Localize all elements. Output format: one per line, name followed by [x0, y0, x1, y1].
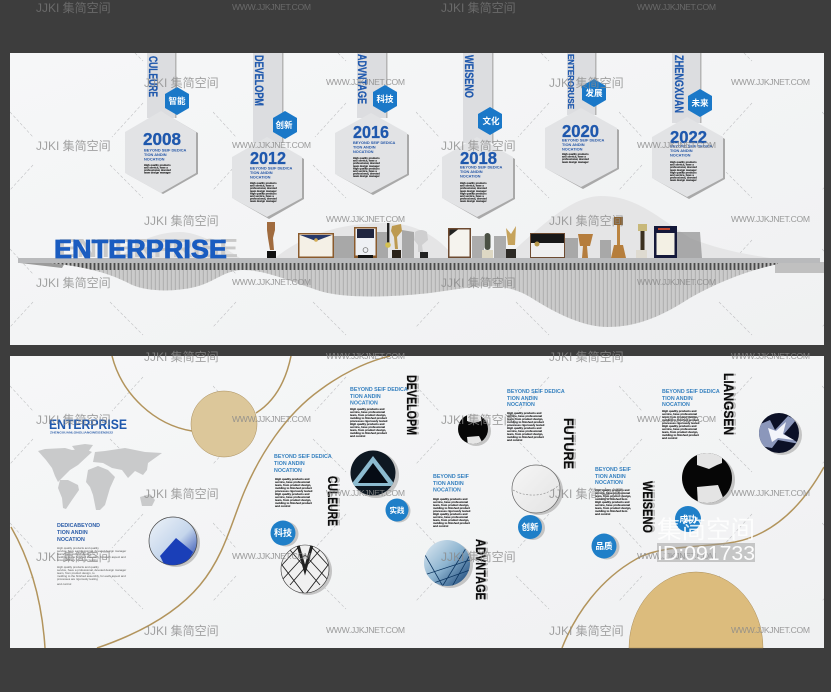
watermarks on top panel: JJKI 集简空间 — [441, 275, 516, 290]
timeline node 2008: NOCATION — [144, 156, 165, 162]
timeline node 2016: and service, have a — [353, 159, 377, 163]
timeline node 2008: 2008 — [143, 129, 181, 149]
timeline node 2020: High quality products — [562, 152, 589, 156]
badge: 科技 — [270, 520, 298, 546]
trophy: wood — [267, 222, 276, 258]
vertical label: FUTURE: FUTURE — [561, 418, 576, 469]
timeline node 2022: NOCATION — [670, 152, 691, 158]
text block: weiseno: team, from product design, — [595, 494, 631, 498]
text block: develop: molding to finished product — [350, 431, 387, 435]
text block: culture: team, from product design, — [275, 483, 311, 487]
text block: liangsen: TION ANDIN — [662, 396, 693, 402]
timeline node 2016: BEYOND SEIF DEDICA — [353, 140, 396, 145]
timeline node 2012: team design manager — [250, 199, 277, 203]
text block: develop: TION ANDIN — [350, 394, 381, 400]
text block: develop: NOCATION — [350, 400, 378, 406]
watermarks on bottom panel: JJKI 集简空间 — [549, 486, 624, 501]
timeline node 2020: ENTERORUSE — [566, 54, 575, 110]
text block: develop: processes rigorously tested — [350, 419, 388, 423]
margin watermarks: JJKI 集简空间 — [441, 0, 516, 15]
timeline node 2012: High quality products — [250, 181, 277, 185]
text block: advantage: service, have professional — [433, 515, 468, 519]
watermarks on bottom panel: WWW.JJKJNET.COM — [326, 625, 405, 635]
text block: future: processes rigorously tested — [507, 423, 545, 427]
text block: weiseno: TION ANDIN — [595, 474, 626, 480]
photo circle: lattice — [281, 540, 332, 595]
timeline node 2018: professional, devoted — [460, 197, 487, 201]
timeline node 2018: WEISENO — [462, 55, 474, 98]
trophy: tall bronze — [611, 217, 626, 258]
timeline node 2022: and service, have a — [670, 163, 694, 167]
photo circle: glowing triangle — [350, 450, 399, 498]
margin watermarks — [36, 0, 716, 15]
timeline node 2008: CULEURE — [146, 56, 158, 97]
text block: future: BEYOND SEIF DEDICA — [507, 389, 565, 395]
text block: weiseno: and control — [595, 512, 610, 516]
text block: liangsen: and control — [662, 436, 677, 440]
timeline node 2018: and service, have a — [460, 194, 484, 198]
watermarks on top panel: WWW.JJKJNET.COM — [232, 140, 311, 150]
gold circle: lower right — [629, 572, 763, 648]
text block: dedica: service, have a professional, devoted design manager — [57, 568, 126, 572]
timeline node 2008: TION ANDIN — [144, 152, 167, 157]
text block: develop: team, from product design, — [350, 428, 386, 432]
text block: develop: High quality products and — [350, 422, 385, 426]
timeline node 2016: NOCATION — [353, 149, 374, 154]
text block: advantage: High quality products and — [433, 497, 468, 501]
vertical label: CULEURE — [325, 476, 342, 526]
watermarks on top panel: WWW.JJKJNET.COM — [637, 140, 716, 150]
text block: liangsen: team, from product design, — [662, 430, 698, 434]
timeline node 2012: professional, devoted — [250, 186, 277, 190]
watermarks on bottom panel: WWW.JJKJNET.COM — [232, 551, 311, 561]
watermarks on top panel: WWW.JJKJNET.COM — [731, 77, 810, 87]
watermarks on top panel: JJKI 集简空间 — [441, 138, 516, 153]
watermarks on top panel: WWW.JJKJNET.COM — [232, 277, 311, 287]
gold circle: upper — [191, 391, 257, 457]
timeline node 2020: 发展 — [585, 88, 603, 98]
heading: ENTERPRISE: ENTERPRISE — [58, 233, 238, 263]
timeline node 2016: TION ANDIN — [353, 144, 376, 150]
timeline node 2022: BEYOND SEIF DEDICA — [670, 144, 713, 148]
text block: advantage: team, from product design, — [433, 503, 469, 507]
timeline node 2016: ADVNTAGE — [355, 54, 367, 104]
timeline node 2022: and service, have a — [670, 173, 694, 177]
watermarks on bottom panel: JJKI 集简空间 — [144, 349, 219, 364]
timeline node 2022: 2022 — [670, 127, 707, 147]
text block: culture: processes rigorously tested — [275, 489, 313, 493]
background hills behind shelf — [120, 196, 770, 258]
text block: culture: High quality products and — [275, 492, 310, 496]
photo circle: black building small — [458, 412, 491, 446]
text block: weiseno: High quality products and — [595, 488, 630, 492]
watermarks on bottom panel: WWW.JJKJNET.COM — [731, 351, 810, 361]
timeline node 2022: 未来 — [691, 98, 709, 108]
timeline node 2008: professional, devoted — [144, 168, 171, 172]
text block: advantage: BEYOND SEIF — [433, 474, 470, 480]
timeline node 2020: team design manager — [562, 160, 589, 164]
text block: develop: molding to finished product — [350, 416, 387, 420]
text block: culture: service, have professional — [275, 480, 310, 484]
text block: future: NOCATION — [507, 402, 535, 408]
vertical label: ADVNTAGE: ADVNTAGE — [476, 539, 490, 600]
timeline node 2016: team design manager — [353, 174, 380, 178]
cast shadows — [334, 230, 702, 258]
watermarks on top panel: WWW.JJKJNET.COM — [326, 214, 405, 224]
text block: dedica: High quality products and quality — [57, 565, 99, 569]
text block: liangsen: team, from product design, — [662, 415, 698, 419]
timeline node 2012: NOCATION — [250, 174, 271, 180]
text block: dedica: molding to the finished assembly, for each aspect and — [57, 555, 126, 559]
photo circle: black building large — [682, 450, 736, 505]
vertical label: FUTURE: FUTURE — [564, 418, 578, 469]
text block: develop — [350, 387, 408, 438]
timeline node 2018: professional, devoted — [460, 186, 487, 190]
watermarks on bottom panel: JJKI 集简空间 — [549, 349, 624, 364]
text block: develop: team, from product design, — [350, 413, 386, 417]
vertical label: DEVELOPM: DEVELOPM — [404, 375, 419, 435]
text block: liangsen: NOCATION — [662, 402, 690, 408]
margin watermarks: JJKI 集简空间 — [36, 0, 111, 15]
text block: future: molding to finished product — [507, 420, 544, 424]
watermarks on top panel: JJKI 集简空间 — [36, 138, 111, 153]
text block: liangsen: High quality products and — [662, 424, 697, 428]
watermarks on bottom panel: JJKI 集简空间 — [144, 623, 219, 638]
watermarks on bottom panel: JJKI 集简空间 — [441, 412, 516, 427]
timeline node 2018: High quality products — [460, 181, 487, 185]
photo circle: blue abstract — [149, 517, 200, 568]
watermarks on top panel: JJKI 集简空间 — [144, 75, 219, 90]
text block: culture: NOCATION — [274, 468, 302, 474]
world map — [38, 444, 162, 510]
text block: culture — [274, 454, 332, 508]
timeline node 2018: team design manager — [460, 199, 487, 203]
text block: develop: service, have professional — [350, 425, 385, 429]
heading: ENTERPRISE: ENTERPRISE — [54, 234, 227, 264]
text block: future: TION ANDIN — [507, 396, 538, 402]
text block: weiseno — [595, 467, 632, 516]
text block: dedica: molding to the finished assembly, for each aspect and — [57, 574, 126, 578]
badge: 科技: 科技 — [274, 527, 292, 538]
timeline node 2016: professional, devoted — [353, 172, 380, 176]
timeline node 2016: and service, have a — [353, 169, 377, 173]
vertical label: LIANGSEN: LIANGSEN — [724, 373, 738, 435]
text block: dedica: processes are rigorously testing — [57, 577, 98, 581]
timeline node 2016: High quality products — [353, 156, 380, 160]
vertical label: CULEURE: CULEURE — [328, 476, 342, 526]
timeline node 2012: professional, devoted — [250, 197, 277, 201]
timeline node 2018: High quality products — [460, 191, 487, 195]
text block: advantage: service, have professional — [433, 500, 468, 504]
text block: liangsen: processes rigorously tested — [662, 421, 700, 425]
badge: 创新 — [518, 515, 545, 540]
text block: future: High quality products and — [507, 426, 542, 430]
text block: future: team, from product design, — [507, 417, 543, 421]
text block: weiseno: NOCATION — [595, 480, 623, 486]
timeline node 2020: NOCATION — [562, 146, 583, 152]
trophy: bronze cup — [578, 234, 593, 258]
timeline node 2016: 科技 — [376, 94, 394, 104]
timeline node 2008 — [125, 53, 198, 194]
badge: 实践: 实践 — [390, 505, 405, 515]
timeline node 2012: BEYOND SEIF DEDICA — [250, 166, 293, 170]
text block: future — [507, 389, 565, 442]
text block: advantage: High quality products and — [433, 512, 468, 516]
timeline node 2020: professional, devoted — [562, 157, 589, 161]
timeline node 2018: BEYOND SEIF DEDICA — [460, 164, 503, 170]
timeline node 2022: TION ANDIN — [670, 148, 693, 153]
text block: culture: High quality products and — [275, 477, 310, 481]
text block: weiseno: molding to finished item — [595, 497, 628, 501]
vertical label: DEVELOPM — [404, 375, 422, 435]
timeline node 2022: High quality products — [670, 170, 697, 174]
text block: liangsen: service, have professional — [662, 412, 697, 416]
text block: dedica: High quality products and quality — [57, 546, 99, 550]
text block: develop: BEYOND SEIF DEDICA — [350, 387, 408, 393]
large ID watermark: 集简空间 — [657, 516, 755, 544]
timeline node 2012 — [232, 53, 304, 219]
panel: top wall elevation — [10, 53, 824, 345]
text block: advantage: molding to finished product — [433, 506, 470, 510]
text block: dedica: and control — [57, 582, 72, 586]
timeline node 2022: ZHENGXUAN — [672, 55, 684, 113]
timeline node 2016 — [335, 53, 409, 195]
panel: bottom wall elevation — [10, 349, 824, 648]
watermarks on top panel: JJKI 集简空间 — [549, 75, 624, 90]
watermarks on top panel: WWW.JJKJNET.COM — [637, 277, 716, 287]
trophy: silver — [414, 230, 428, 258]
text block: weiseno: service, have professional — [595, 503, 630, 507]
text block: future: team, from product design, — [507, 432, 543, 436]
text block: advantage: TION ANDIN — [433, 481, 464, 487]
text block: develop: and control — [350, 434, 365, 438]
timeline node 2018: TION ANDIN — [460, 169, 483, 174]
vertical label: LIANGSEN: LIANGSEN — [721, 373, 736, 435]
timeline node 2012: High quality products — [250, 191, 277, 195]
badge: hidden blue: 成功 — [679, 514, 697, 524]
timeline node 2018: 2018 — [460, 148, 497, 168]
gold curves — [11, 356, 824, 648]
timeline node 2016: professional, devoted — [353, 161, 380, 165]
watermarks on top panel: JJKI 集简空间 — [549, 213, 624, 228]
timeline node 2022: team design manager — [670, 178, 697, 182]
text block: liangsen: BEYOND SEIF DEDICA — [662, 389, 720, 395]
trophy: gold figure with medal — [385, 223, 402, 258]
text block: culture: TION ANDIN — [274, 461, 305, 467]
text block: dedica — [57, 523, 126, 586]
text block: dedica: TION ANDIN — [57, 530, 88, 536]
text block: advantage: NOCATION — [433, 488, 461, 494]
text block: weiseno: team, from product design, — [595, 506, 631, 510]
timeline node 2018: and service, have a — [460, 184, 484, 188]
certificate: navy frame — [654, 226, 677, 258]
timeline node 2012: and service, have a — [250, 184, 274, 188]
text block: weiseno: molding to finished item — [595, 509, 628, 513]
timeline node 2008: and service, have a — [144, 166, 168, 170]
watermarks on bottom panel — [36, 349, 810, 638]
text block: culture: team, from product design, — [275, 498, 311, 502]
timeline node 2018: team design manager — [460, 189, 487, 193]
timeline node 2022 — [652, 53, 725, 199]
badge: 创新: 创新 — [521, 522, 539, 532]
text block: liangsen: High quality products and — [662, 409, 697, 413]
timeline node 2016: team design manager — [353, 164, 380, 168]
text block: liangsen: molding to finished product — [662, 418, 699, 422]
watermarks on bottom panel: JJKI 集简空间 — [36, 412, 111, 427]
text block: advantage: and control — [433, 524, 448, 528]
text block: develop: service, have professional — [350, 410, 385, 414]
text block: dedica: service, have a professional, devoted design manager — [57, 549, 126, 553]
text block: liangsen: molding to finished product — [662, 433, 699, 437]
trophy: gold and black — [636, 224, 647, 258]
text block: advantage — [433, 474, 471, 528]
text block: dedica: NOCATION — [57, 537, 85, 543]
heading: ENTERPRISE left block: ENTERPRISE — [49, 417, 127, 432]
watermarks on top panel: WWW.JJKJNET.COM — [326, 77, 405, 87]
text block: dedica: DEDICABEYOND — [57, 523, 100, 529]
timeline node 2020: BEYOND SEIF DEDICA — [562, 138, 605, 142]
text block: dedica: team, from product design, to — [57, 552, 95, 556]
vertical label: ADVNTAGE: ADVNTAGE — [473, 539, 488, 600]
vertical label: CULEURE: CULEURE — [325, 476, 340, 526]
text block: future: molding to finished product — [507, 435, 544, 439]
timeline node 2022: professional, devoted — [670, 165, 697, 169]
heading: ENTERPRISE left block: ZHENGXUANLONGLIANGWEISEN2022 — [50, 430, 113, 434]
text block: advantage: processes rigorously tested — [433, 509, 471, 513]
text block: culture: and control — [275, 504, 290, 508]
large ID watermark — [657, 516, 755, 565]
timeline node 2018 — [442, 53, 515, 219]
text block: liangsen — [662, 389, 720, 440]
timeline node 2012: 2012 — [250, 148, 286, 168]
timeline node 2008: BEYOND SEIF DEDICA — [144, 148, 187, 152]
timeline node 2020: and service, have a — [562, 155, 586, 159]
badge: 品质: 品质 — [595, 541, 613, 551]
timeline node 2020: 2020 — [562, 121, 599, 141]
photo circle: pale white — [512, 465, 563, 515]
timeline node 2012: team design manager — [250, 189, 277, 193]
margin watermarks: WWW.JJKJNET.COM — [232, 2, 311, 12]
shelf with slatted wave — [18, 258, 824, 329]
timeline node 2022: professional, devoted — [670, 176, 697, 180]
timeline node 2018: 文化 — [482, 116, 500, 126]
watermarks on bottom panel: WWW.JJKJNET.COM — [232, 414, 311, 424]
vertical label: WEISENO: WEISENO — [642, 481, 658, 533]
text block: culture: service, have professional — [275, 495, 310, 499]
watermarks on bottom panel: WWW.JJKJNET.COM — [637, 414, 716, 424]
timeline node 2012: TION ANDIN — [250, 170, 273, 175]
vertical label: WEISENO: WEISENO — [640, 481, 655, 533]
trophy: gold star — [506, 226, 516, 258]
timeline node 2022: team design manager — [670, 168, 697, 172]
timeline node 2008: 智能 — [168, 96, 186, 106]
certificate: black corner — [448, 228, 471, 258]
awards row on shelf — [267, 217, 702, 258]
watermarks on top panel: JJKI 集简空间 — [144, 213, 219, 228]
timeline node 2020: TION ANDIN — [562, 142, 585, 147]
timeline node 2012: 创新 — [275, 120, 293, 130]
timeline node 2020 — [545, 53, 619, 189]
timeline node 2012: DEVELOPM — [252, 55, 264, 106]
watermarks on bottom panel: JJKI 集简空间 — [441, 549, 516, 564]
text block: weiseno: service, have professional — [595, 491, 630, 495]
photo circle: glass building — [424, 540, 473, 590]
photo circle: light burst — [758, 413, 802, 455]
text block: future: service, have professional — [507, 429, 542, 433]
watermarks on top panel: WWW.JJKJNET.COM — [731, 214, 810, 224]
certificate: landscape gold — [298, 233, 334, 258]
timeline node 2016: 2016 — [353, 122, 389, 142]
text block: future: High quality products and — [507, 411, 542, 415]
badge: 品质 — [592, 534, 620, 560]
trophy: dark column — [482, 233, 493, 258]
large ID watermark: ID:091733 — [657, 543, 755, 565]
certificate: portrait — [354, 227, 377, 258]
watermarks on bottom panel: JJKI 集简空间 — [549, 623, 624, 638]
watermarks on bottom panel: JJKI 集简空间 — [36, 549, 111, 564]
margin watermarks: WWW.JJKJNET.COM — [637, 2, 716, 12]
watermarks on bottom panel: JJKI 集简空间 — [144, 486, 219, 501]
text block: advantage: team, from product design, — [433, 518, 469, 522]
certificate: landscape black — [530, 233, 565, 258]
watermarks on bottom panel: WWW.JJKJNET.COM — [731, 488, 810, 498]
text block: culture: BEYOND SEIF DEDICA — [274, 454, 332, 460]
badge: 实践 — [386, 498, 410, 522]
text block: develop: High quality products and — [350, 407, 385, 411]
badge: hidden blue — [675, 506, 701, 532]
text block: dedica: processes are rigorously testing — [57, 558, 98, 562]
text block: future: service, have professional — [507, 414, 542, 418]
timeline node 2016: High quality products — [353, 166, 380, 170]
watermarks on bottom panel: WWW.JJKJNET.COM — [326, 351, 405, 361]
watermarks on top panel: JJKI 集简空间 — [36, 275, 111, 290]
text block: culture: molding to finished product — [275, 486, 312, 490]
timeline node 2008: team design manager — [144, 170, 171, 174]
text block: culture: molding to finished product — [275, 501, 312, 505]
vertical label: DEVELOPM: DEVELOPM — [406, 375, 422, 435]
watermarks on bottom panel: WWW.JJKJNET.COM — [637, 551, 716, 561]
watermarks on bottom panel: WWW.JJKJNET.COM — [731, 625, 810, 635]
text block: dedica: team, from product design, to — [57, 571, 95, 575]
timeline node 2022: High quality products — [670, 160, 697, 164]
watermarks on top panel — [36, 75, 810, 290]
text block: weiseno: BEYOND SEIF — [595, 467, 632, 473]
watermarks on bottom panel: WWW.JJKJNET.COM — [326, 488, 405, 498]
text block: advantage: molding to finished product — [433, 521, 470, 525]
timeline node 2012: and service, have a — [250, 194, 274, 198]
timeline node 2018: NOCATION — [460, 174, 481, 178]
text block: liangsen: service, have professional — [662, 427, 697, 431]
text block: future: and control — [507, 438, 522, 442]
timeline node 2008: High quality products — [144, 163, 171, 167]
text block: weiseno: High quality products and — [595, 500, 630, 504]
